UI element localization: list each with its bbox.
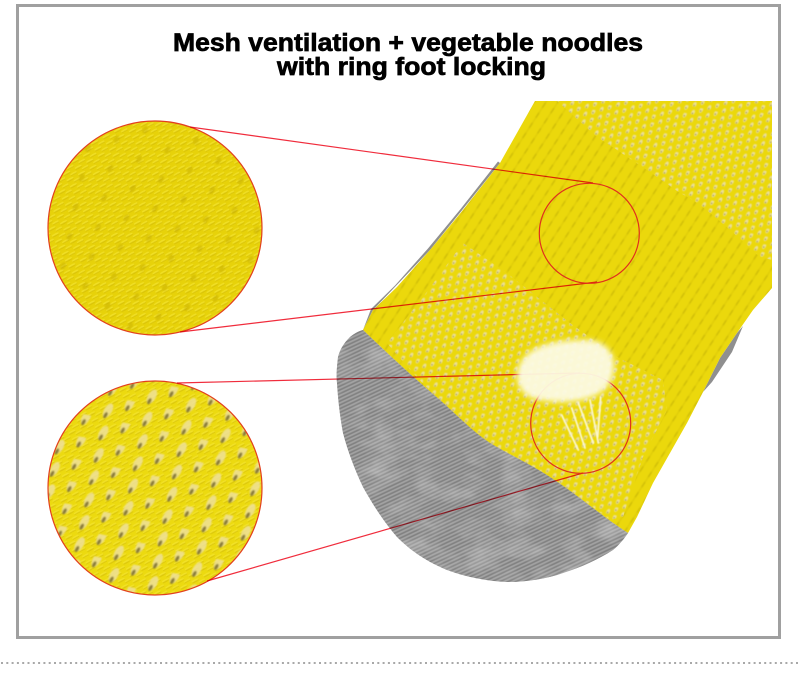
big circle: mesh close-up xyxy=(45,378,265,598)
sock photo xyxy=(330,90,780,587)
upper mesh panel xyxy=(557,101,772,260)
title: with ring foot locking xyxy=(276,53,546,81)
red callout lines xyxy=(177,127,597,581)
small circle: mesh area xyxy=(531,373,631,473)
small circle: solid knit area xyxy=(539,183,639,283)
yellow sock body xyxy=(363,101,772,533)
air fibres xyxy=(562,397,601,450)
lower mesh panel xyxy=(388,244,667,520)
white breathability puff xyxy=(517,340,614,450)
title xyxy=(173,29,643,81)
dotted separator xyxy=(1,662,800,664)
big circle: solid knit close-up xyxy=(45,118,265,338)
title: Mesh ventilation + vegetable noodles xyxy=(173,29,643,57)
sock side edge, grey xyxy=(363,162,743,392)
grey toe xyxy=(330,325,635,587)
